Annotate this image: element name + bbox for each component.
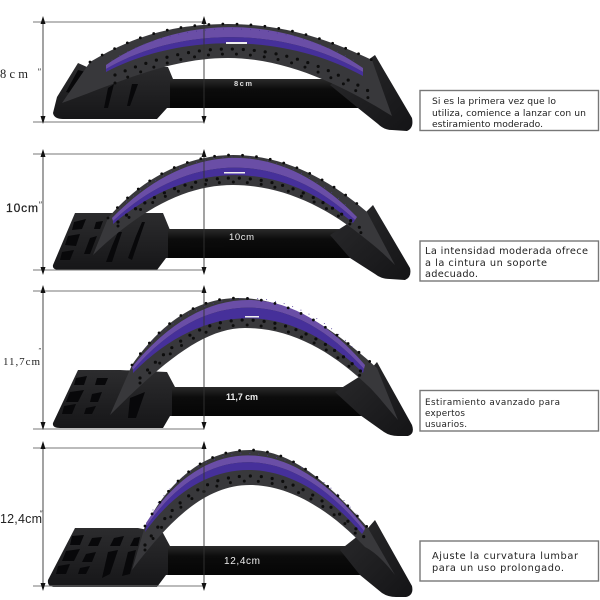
right foot bbox=[340, 520, 412, 597]
callout 3: Estiramiento avanzado para bbox=[425, 398, 560, 408]
highlight bbox=[224, 172, 245, 174]
dimension lines: 10cm bbox=[33, 149, 206, 275]
base bbox=[48, 528, 170, 587]
arch bbox=[110, 298, 398, 420]
right foot bbox=[330, 205, 410, 280]
groove bbox=[194, 400, 226, 404]
highlight bbox=[245, 316, 259, 318]
callout 2 bbox=[420, 241, 598, 281]
connecting bar bbox=[168, 546, 364, 575]
connecting bar bbox=[170, 79, 365, 108]
height label: 12,4cm: 12,4cm bbox=[0, 512, 42, 526]
purple band bbox=[132, 300, 365, 370]
callout 3 bbox=[420, 390, 598, 431]
connecting bar bbox=[172, 387, 364, 416]
connecting bar bbox=[168, 229, 355, 258]
bar label: 8cm: 8cm bbox=[234, 79, 252, 88]
callout 4: Ajuste la curvatura lumbar bbox=[432, 551, 579, 562]
dimension lines: 12,4cm bbox=[33, 441, 206, 591]
callout 1: estiramiento moderado. bbox=[432, 119, 543, 130]
purple band bbox=[112, 158, 357, 221]
nubs bbox=[132, 298, 377, 368]
arch bbox=[62, 24, 392, 116]
callout 1 bbox=[420, 90, 598, 130]
height label: 8cm: 8cm bbox=[0, 67, 28, 81]
purple band bbox=[146, 455, 365, 531]
nubs bbox=[90, 24, 372, 62]
device 2: 10cm stretcher bbox=[53, 155, 410, 280]
callout 3: usuarios. bbox=[425, 420, 467, 430]
arch bbox=[93, 155, 395, 265]
right foot bbox=[335, 362, 413, 436]
nubs bbox=[145, 450, 368, 528]
callout 2: La intensidad moderada ofrece bbox=[425, 246, 588, 257]
foot pads bbox=[56, 535, 140, 578]
purple band bbox=[106, 27, 363, 72]
dimension lines: 11,7cm bbox=[33, 285, 206, 430]
bar label: 11,7 cm: 11,7 cm bbox=[226, 392, 258, 402]
foot pads bbox=[62, 376, 145, 418]
right foot bbox=[330, 55, 412, 131]
base bbox=[53, 370, 175, 428]
callout 3: expertos bbox=[425, 409, 465, 419]
callout 1: Si es la primera vez que lo bbox=[432, 96, 556, 107]
groove bbox=[190, 558, 226, 562]
callout 2: adecuado. bbox=[425, 269, 478, 280]
foot pads bbox=[60, 219, 145, 262]
device 3: 11,7cm stretcher bbox=[53, 298, 413, 436]
base bbox=[53, 213, 170, 270]
callout 2: a la cintura un soporte bbox=[425, 258, 547, 269]
bar label: 10cm: 10cm bbox=[229, 232, 254, 243]
quote mark 1: " bbox=[37, 67, 41, 77]
arch bbox=[132, 450, 395, 575]
device 1: 8cm stretcher bbox=[53, 24, 412, 131]
device 4: 12,4cm stretcher bbox=[48, 450, 412, 597]
height label: 10cm: 10cm bbox=[6, 201, 38, 215]
dimension lines: 8cm bbox=[33, 16, 206, 124]
callout 4 bbox=[420, 541, 598, 581]
quote mark 3: " bbox=[38, 347, 41, 355]
quote mark 2: " bbox=[38, 200, 42, 210]
callout 4: para un uso prolongado. bbox=[432, 563, 564, 574]
base bbox=[53, 63, 173, 119]
foot pads bbox=[66, 67, 138, 108]
highlight bbox=[226, 42, 247, 44]
nubs bbox=[108, 155, 367, 218]
height label: 11,7cm: 11,7cm bbox=[3, 356, 40, 368]
callout 1: utiliza, comience a lanzar con un bbox=[432, 108, 586, 119]
bar label: 12,4cm: 12,4cm bbox=[224, 556, 260, 567]
quote mark 4: " bbox=[39, 509, 43, 518]
groove bbox=[189, 243, 225, 247]
groove bbox=[191, 92, 227, 96]
